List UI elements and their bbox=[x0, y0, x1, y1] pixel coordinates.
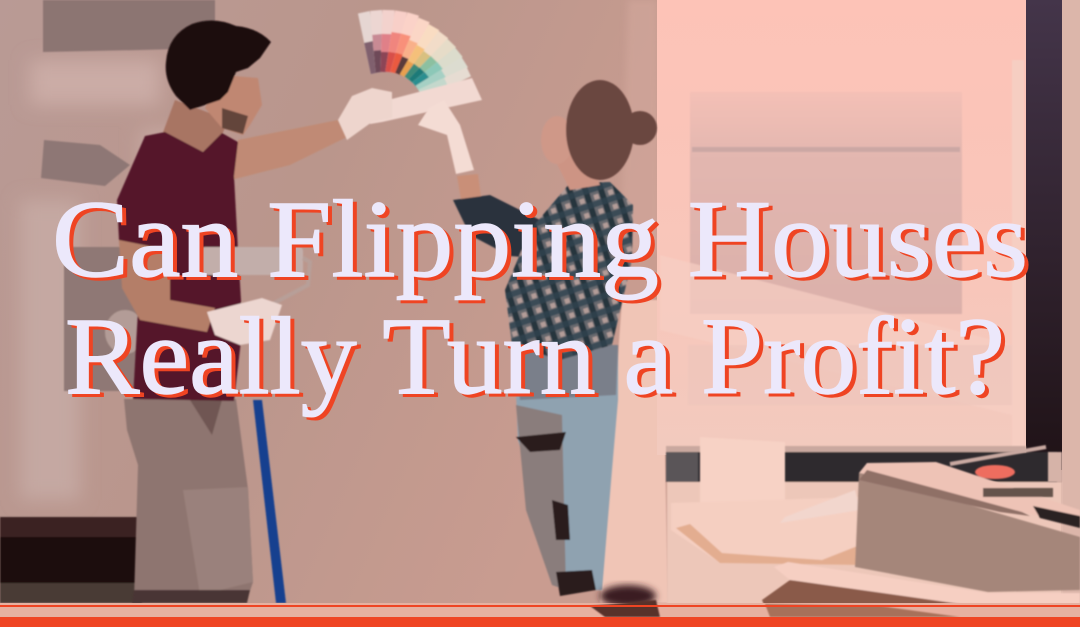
bottom floor strip bbox=[0, 600, 1080, 627]
floor band bbox=[0, 603, 1080, 617]
lower glove bbox=[207, 298, 282, 345]
color fan deck bbox=[338, 10, 482, 140]
title text: Can Flipping Houses bbox=[52, 178, 1028, 300]
title shadow bbox=[56, 181, 1032, 420]
hair bbox=[566, 80, 657, 180]
face bbox=[205, 75, 262, 135]
pole bbox=[253, 400, 286, 603]
box side bbox=[855, 473, 1080, 592]
woman with plaid shirt bbox=[418, 80, 657, 607]
shelf board bbox=[671, 497, 860, 565]
card strip bbox=[365, 78, 482, 124]
plaid shirt bbox=[505, 182, 633, 360]
shoe bbox=[600, 585, 656, 607]
shelf and materials bbox=[671, 437, 1080, 617]
plaster mottling bbox=[20, 60, 220, 500]
thin orange line bbox=[0, 605, 1080, 607]
orange footer bar bbox=[0, 617, 1080, 627]
blurred view through window bbox=[660, 60, 1024, 450]
plaid sleeve bbox=[453, 195, 560, 260]
fan blades bbox=[358, 10, 471, 99]
forearm bbox=[457, 174, 482, 205]
face bbox=[541, 116, 573, 164]
lower board bbox=[762, 580, 1080, 617]
drywall patches bbox=[41, 0, 215, 391]
lower arm bbox=[119, 240, 215, 332]
window frame bbox=[1026, 0, 1062, 470]
papers bbox=[780, 490, 860, 523]
door jamb bbox=[620, 0, 661, 250]
rips in jeans bbox=[516, 432, 596, 596]
man with paint roller bbox=[117, 20, 347, 603]
glove bbox=[418, 100, 474, 174]
shoe blur bbox=[590, 600, 660, 617]
title text: Really Turn a Profit? bbox=[65, 295, 1005, 417]
right wall bbox=[1062, 0, 1080, 610]
neck bbox=[555, 150, 600, 190]
roller bbox=[201, 247, 303, 275]
title shadow: Can Flipping Houses bbox=[56, 181, 1032, 303]
window sill bbox=[666, 446, 1062, 607]
box lid bbox=[859, 462, 1080, 525]
tools bbox=[950, 447, 1046, 464]
board shadow bbox=[765, 604, 960, 617]
beard bbox=[222, 108, 248, 134]
pants bbox=[124, 399, 253, 600]
raised arm bbox=[231, 120, 347, 180]
raised glove bbox=[338, 88, 392, 140]
stairs in shadow bbox=[0, 517, 142, 603]
title shadow: Really Turn a Profit? bbox=[69, 298, 1009, 420]
neck bbox=[162, 100, 228, 152]
window glass bbox=[657, 0, 1027, 455]
title bbox=[52, 178, 1032, 420]
title text bbox=[52, 178, 1028, 417]
shirt bbox=[117, 132, 241, 401]
foam blocks bbox=[700, 437, 785, 517]
roller frame bbox=[265, 258, 310, 308]
jeans bbox=[514, 345, 618, 590]
hair bbox=[166, 20, 271, 110]
wall bbox=[0, 0, 670, 610]
